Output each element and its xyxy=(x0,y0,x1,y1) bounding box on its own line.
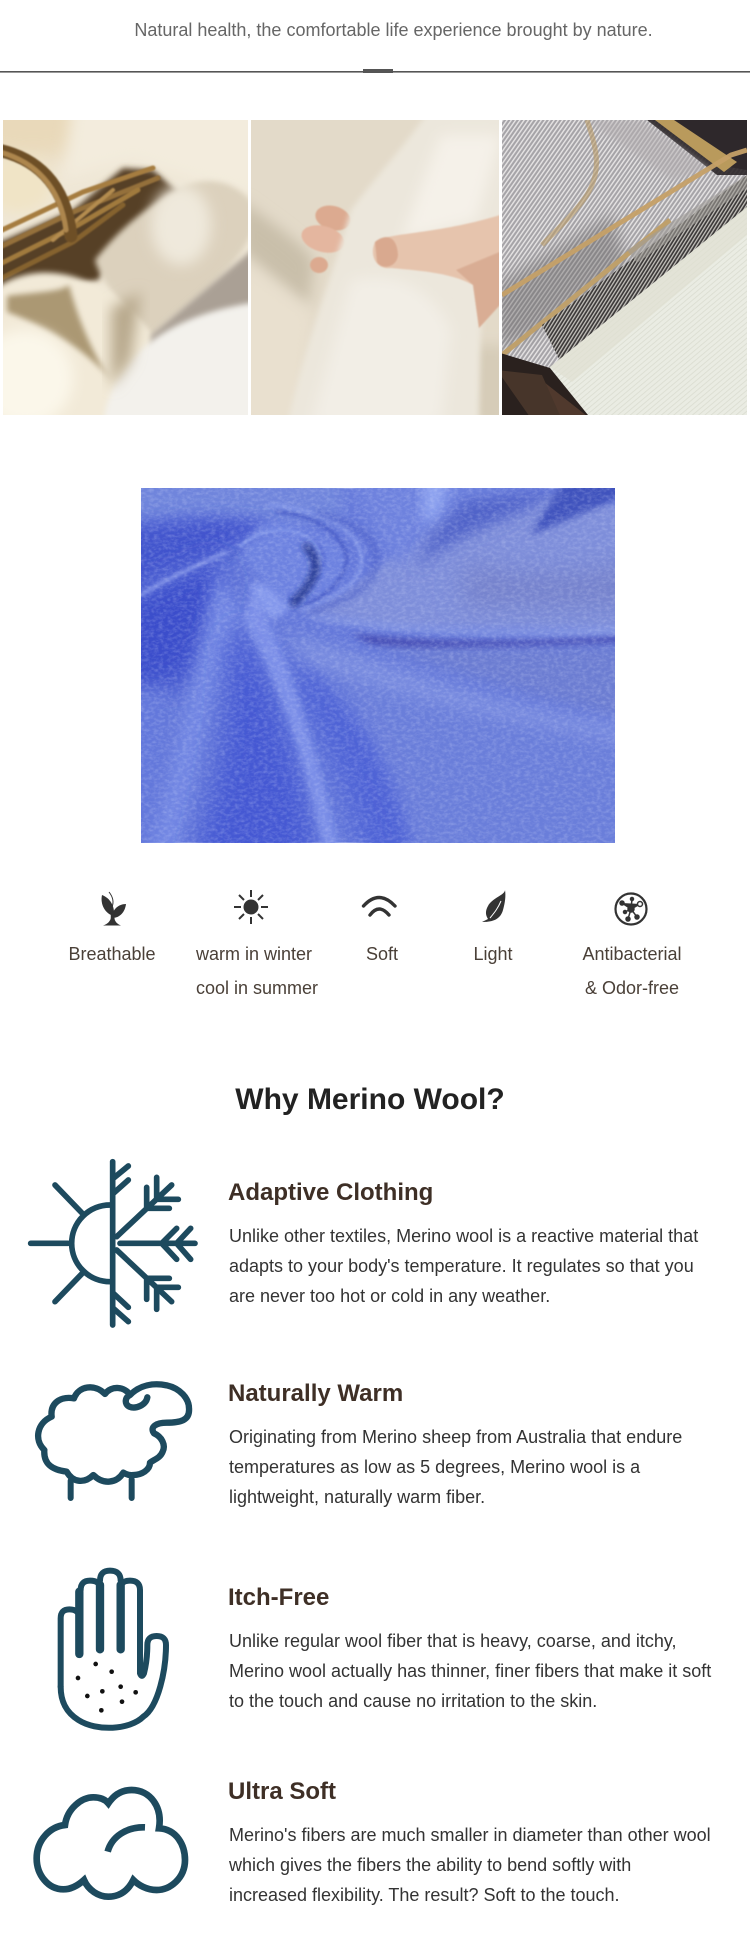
photo: blue fabric swirl xyxy=(141,488,615,843)
icon: hand xyxy=(58,1568,169,1731)
body text: Merino's fibers are much smaller in diameter than other wool xyxy=(229,1825,711,1845)
body text: lightweight, naturally warm fiber. xyxy=(229,1487,485,1507)
icon: sprout xyxy=(102,892,126,926)
header divider xyxy=(0,69,750,73)
body text: are never too hot or cold in any weather. xyxy=(229,1286,550,1306)
body text xyxy=(229,1226,698,1306)
label: antibacterial and odor-free xyxy=(582,944,682,998)
label: soft: Soft xyxy=(366,944,398,964)
photo: hand holding wool xyxy=(251,120,499,415)
photo: loom xyxy=(502,120,747,415)
icon: sun xyxy=(234,890,268,924)
title: Itch-Free xyxy=(228,1584,329,1611)
icon: sun and snowflake xyxy=(28,1158,198,1328)
body text: which gives the fibers the ability to bend softly with xyxy=(229,1855,631,1875)
label: breathable: Breathable xyxy=(68,944,156,964)
section: itch-free xyxy=(228,1584,712,1711)
label: warm in winter cool in summer: cool in summer xyxy=(196,978,318,998)
body text xyxy=(229,1631,712,1711)
label: antibacterial and odor-free: Antibacterial xyxy=(582,944,682,964)
icon: soft arcs xyxy=(362,896,397,917)
body text: adapts to your body's temperature. It regulates so that you xyxy=(229,1256,694,1276)
icon: leaf xyxy=(482,890,506,922)
body text: Originating from Merino sheep from Australia that endure xyxy=(229,1427,682,1447)
body text: to the touch and cause no irritation to the skin. xyxy=(229,1691,597,1711)
photo: wool and basket xyxy=(3,120,248,415)
section: ultra soft xyxy=(228,1778,711,1905)
label: antibacterial and odor-free: & Odor-free xyxy=(585,978,679,998)
body text xyxy=(229,1427,682,1507)
icon: cloud xyxy=(33,1786,188,1900)
body text: Merino wool actually has thinner, finer fibers that make it soft xyxy=(229,1661,711,1681)
body text: temperatures as low as 5 degrees, Merino wool is a xyxy=(229,1457,640,1477)
title: Ultra Soft xyxy=(228,1778,336,1805)
title: Adaptive Clothing xyxy=(228,1179,433,1206)
icon: sheep xyxy=(34,1381,192,1501)
label: light: Light xyxy=(473,944,513,964)
label: warm in winter cool in summer: warm in winter xyxy=(196,944,312,964)
section: adaptive clothing xyxy=(228,1179,698,1306)
feature row xyxy=(68,890,682,998)
body text: Unlike regular wool fiber that is heavy, coarse, and itchy, xyxy=(229,1631,677,1651)
tagline: Natural health, the comfortable life experience brought by nature. xyxy=(134,20,653,40)
section: naturally warm xyxy=(228,1380,682,1507)
body text: increased flexibility. The result? Soft to the touch. xyxy=(229,1885,620,1905)
label: warm in winter cool in summer xyxy=(196,944,318,998)
heading: why merino wool: Why Merino Wool? xyxy=(235,1083,505,1116)
title: Naturally Warm xyxy=(228,1380,403,1407)
icon: antibacterial xyxy=(614,892,648,926)
body text xyxy=(229,1825,711,1905)
body text: Unlike other textiles, Merino wool is a reactive material that xyxy=(229,1226,698,1246)
